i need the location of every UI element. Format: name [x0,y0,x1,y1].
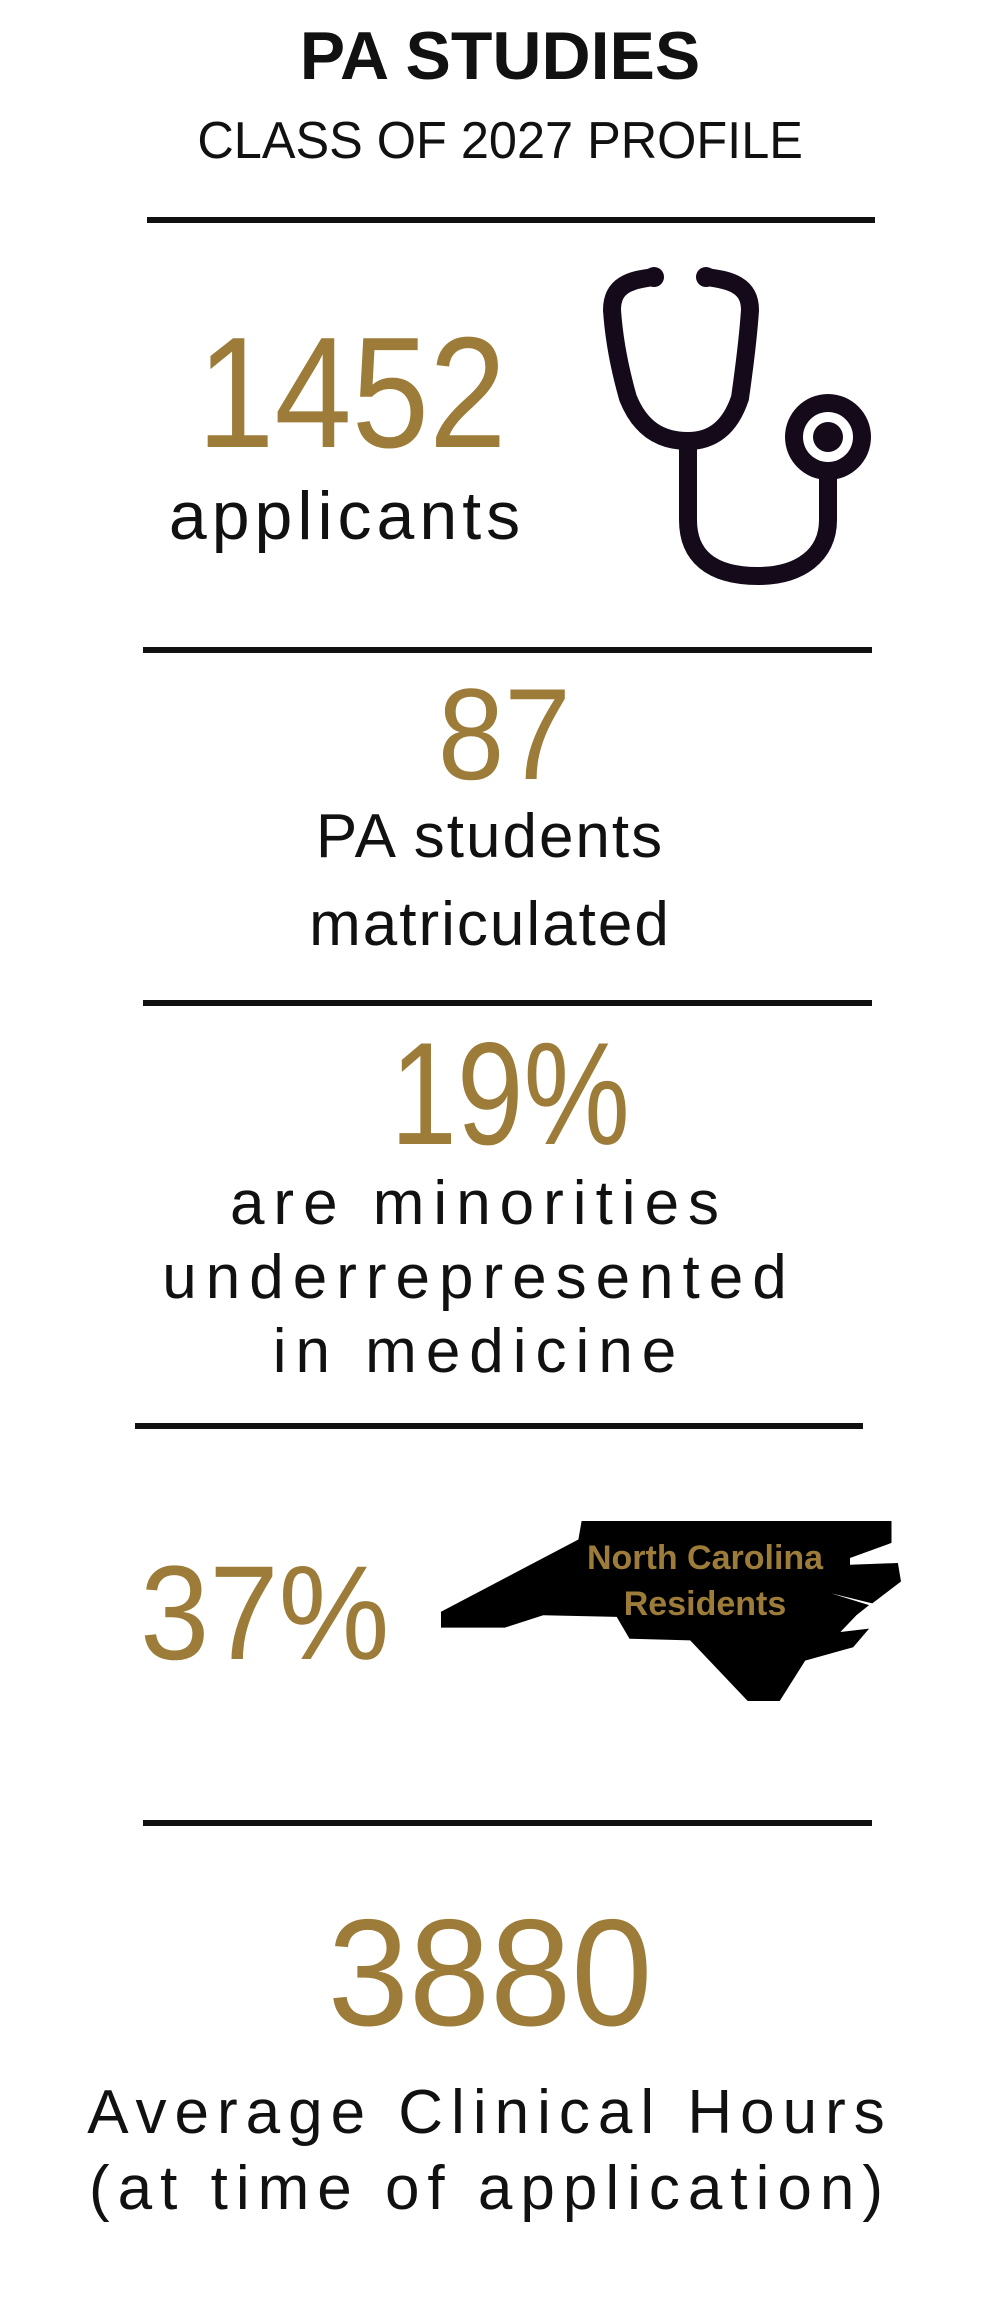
label: minorities text: in medicine [273,1317,685,1386]
stat: clinical hours [87,1888,893,2223]
number: 37%: 37% [140,1539,389,1688]
label: average clinical hours: (at time of application) [89,2154,891,2223]
label: applicants: applicants [169,478,525,554]
label: PA students matriculated: PA students [316,802,664,871]
stat: applicants [169,305,525,554]
label: average clinical hours [87,2078,893,2223]
label: minorities text: underrepresented [162,1243,796,1312]
title: PA STUDIES [300,18,700,94]
stat: NC residents [140,1521,901,1701]
stat: minorities [162,1012,796,1386]
number: 87: 87 [437,661,571,807]
number: 19%: 19% [390,1012,630,1175]
label: North Carolina Residents: North Carolina [587,1539,823,1577]
number: 3880: 3880 [328,1888,652,2058]
label: average clinical hours: Average Clinical Hours [87,2078,893,2147]
subtitle: CLASS OF 2027 PROFILE [197,112,803,170]
stat: matriculated [309,661,671,959]
label: PA students matriculated: matriculated [309,890,671,959]
label: PA students matriculated [309,802,671,959]
number: 1452: 1452 [197,305,507,481]
label: North Carolina Residents [587,1539,824,1623]
label: minorities text [162,1169,796,1386]
icon: North Carolina map [441,1521,901,1701]
icon: stethoscope [603,267,871,585]
label: North Carolina Residents: Residents [624,1585,786,1623]
label: minorities text: are minorities [230,1169,728,1238]
